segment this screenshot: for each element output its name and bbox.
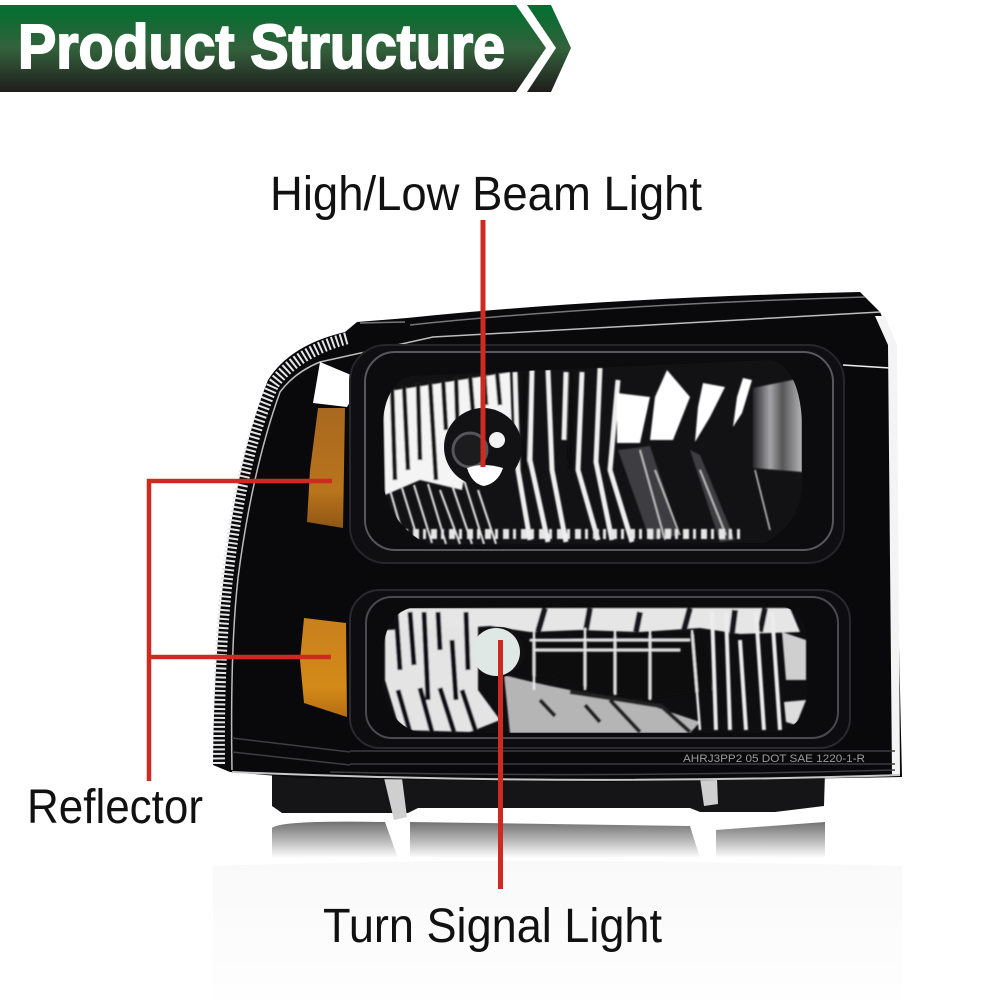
upper amber reflector <box>307 408 345 528</box>
banner title: Product Structure <box>18 13 505 82</box>
right end reflection <box>782 632 806 680</box>
leader line turn signal <box>498 640 503 889</box>
callout: reflector <box>27 481 332 834</box>
thin white arcs lower <box>640 450 770 540</box>
textured bottom band <box>395 529 740 539</box>
lower bulb <box>472 627 525 677</box>
label turn signal: Turn Signal Light <box>323 900 662 953</box>
lower lens frame <box>350 590 850 748</box>
chrome grey right dome <box>753 378 802 472</box>
bottom strip lines <box>232 738 895 775</box>
bulb highlight <box>489 432 505 448</box>
dark streaks middle <box>524 372 572 470</box>
bulb dark crescent <box>475 627 525 677</box>
DOT marking: AHRJ3PP2 05 DOT SAE 1220-1-R <box>683 753 865 765</box>
white mass left <box>383 372 512 495</box>
upper lens frame <box>350 345 844 563</box>
white cutout by amber <box>313 362 363 407</box>
right clear strip <box>875 316 900 775</box>
headlight <box>213 292 902 820</box>
bulb white glow <box>467 465 503 486</box>
top white band <box>392 608 800 634</box>
banner arrow background <box>0 5 571 92</box>
lower lens reflector <box>384 606 807 733</box>
title banner <box>0 5 571 92</box>
inner rim line <box>232 312 880 770</box>
bulb chrome ring <box>453 433 487 467</box>
grey lower reflection <box>504 675 700 733</box>
mounting tabs <box>384 778 718 820</box>
bulb dark socket <box>444 408 522 486</box>
dark diagonal accents <box>540 692 690 732</box>
housing reflection <box>272 822 825 858</box>
black body silhouette <box>213 292 902 782</box>
label high/low beam: High/Low Beam Light <box>270 168 702 221</box>
lower lens inner bezel <box>366 597 838 738</box>
callout: high/low beam <box>270 168 702 467</box>
lower mounting housing <box>272 772 825 813</box>
top trim highlights <box>360 297 865 325</box>
white patches right <box>617 370 752 443</box>
bulb pale disc <box>472 628 520 676</box>
right lower glint <box>784 700 806 725</box>
clear bottom edge <box>232 772 900 780</box>
white mass left <box>385 626 500 732</box>
dark streaks over white mass <box>392 372 500 480</box>
white streaks middle <box>515 368 632 542</box>
faint lower reflection <box>213 861 902 1000</box>
white streaks right <box>712 612 780 730</box>
upper lens reflector <box>383 368 802 545</box>
label reflector: Reflector <box>27 781 203 834</box>
callout: turn signal <box>323 640 662 953</box>
leader lines reflector <box>149 481 332 781</box>
upper bulb <box>444 408 522 486</box>
fine white streaks lower left <box>390 480 496 544</box>
dark streaks left <box>396 612 476 732</box>
right notch highlight <box>843 365 890 368</box>
upper lens inner bezel <box>365 352 833 550</box>
lower amber reflector <box>300 618 347 717</box>
headlight reflection <box>213 822 902 1000</box>
ribbed left edge <box>219 338 348 764</box>
mid highlights <box>530 626 700 730</box>
dark mid band <box>510 634 712 700</box>
grey arcs lower <box>618 446 735 542</box>
leader line high/low beam <box>480 220 486 467</box>
top band dark notches <box>538 608 765 634</box>
